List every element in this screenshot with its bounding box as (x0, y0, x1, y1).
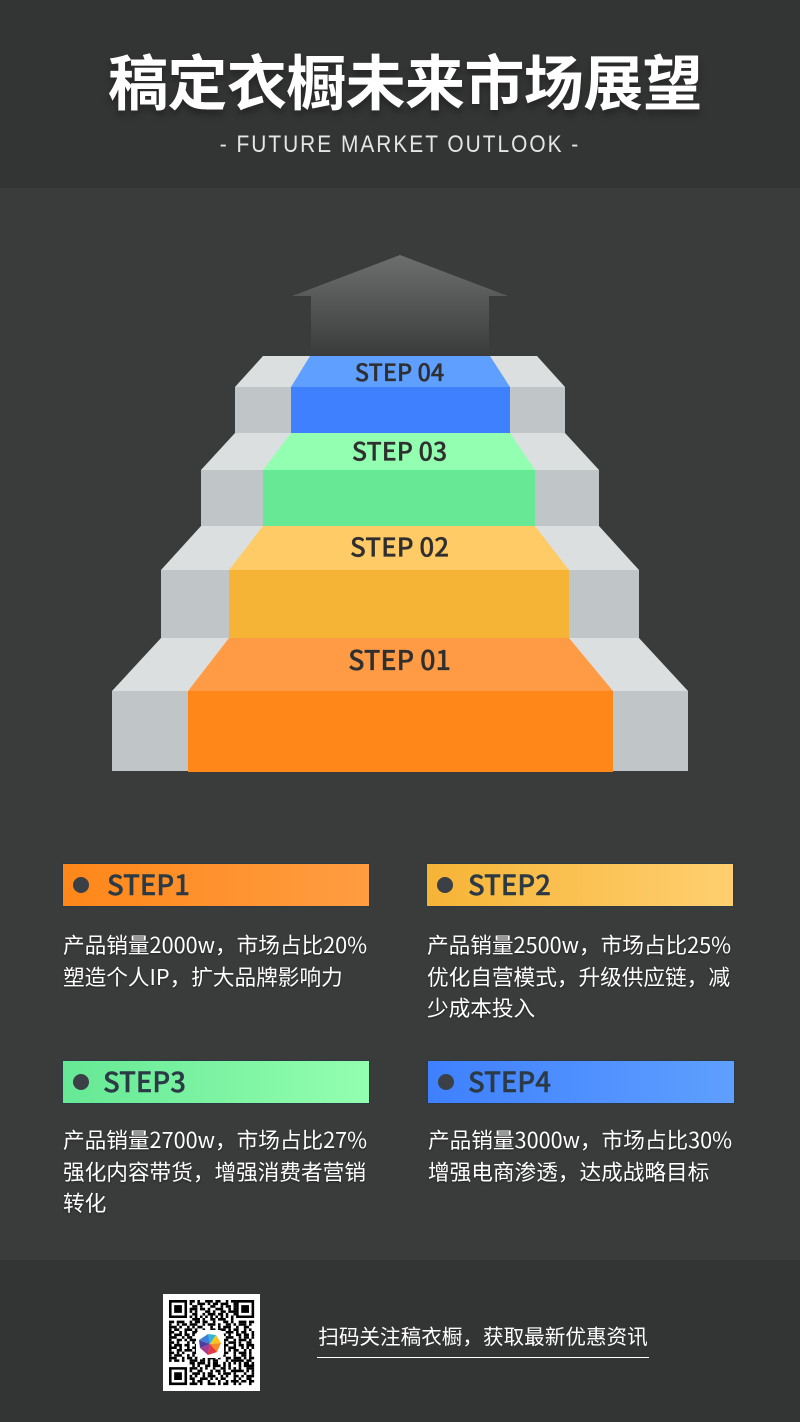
step 2 text: 优化自营模式，升级供应链，减 (427, 960, 730, 992)
step 4 text: 增强电商渗透，达成战略目标 (428, 1156, 709, 1186)
step 2 text (427, 929, 731, 1023)
step 1 text (63, 929, 367, 992)
step 03 (201, 432, 599, 526)
QR centre logo (196, 1330, 224, 1358)
step 1 text: 产品销量2000w，市场占比20% (63, 929, 367, 960)
icon: upward arrow (292, 255, 508, 356)
step 02 (161, 526, 639, 638)
title: 稿定衣橱未来市场展望 (108, 36, 702, 123)
step 3 text (63, 1124, 367, 1218)
panel: step 1 heading bar (63, 864, 369, 906)
staircase infographic (112, 255, 688, 772)
subtitle: - FUTURE MARKET OUTLOOK - (220, 131, 580, 158)
step 2 label: STEP2 (468, 863, 551, 903)
step 3 label: STEP3 (103, 1060, 186, 1100)
step 4 label: STEP4 (468, 1060, 551, 1100)
step 2 text: 少成本投入 (427, 992, 535, 1023)
bullet dot (438, 1074, 454, 1090)
panel: step 4 heading bar (428, 1061, 734, 1103)
bullet dot (73, 1074, 89, 1090)
step 4 text: 产品销量3000w，市场占比30% (428, 1124, 732, 1155)
panel: step 2 heading bar (427, 864, 733, 906)
panel: step 3 heading bar (63, 1061, 369, 1103)
step 1 text: 塑造个人IP，扩大品牌影响力 (63, 960, 343, 992)
QR code (163, 1294, 260, 1391)
bullet dot (73, 877, 89, 893)
footer call to action: 扫码关注稿衣橱，获取最新优惠资讯 (318, 1320, 648, 1350)
step 2 text: 产品销量2500w，市场占比25% (427, 929, 731, 960)
bullet dot (437, 877, 453, 893)
footer band (0, 1260, 800, 1422)
header band (0, 0, 800, 188)
step 3 text: 产品销量2700w，市场占比27% (63, 1124, 367, 1155)
step 01 (112, 638, 688, 772)
step 3 text: 强化内容带货，增强消费者营销 (63, 1156, 366, 1186)
step 3 text: 转化 (63, 1187, 106, 1218)
step 01: STEP 01 (348, 639, 451, 678)
step 02: STEP 02 (350, 528, 449, 564)
step 04 (235, 354, 565, 433)
step 1 label: STEP1 (107, 863, 190, 903)
step 04: STEP 04 (355, 354, 444, 388)
QR finder patterns (169, 1300, 254, 1385)
step 4 text (428, 1124, 732, 1186)
step 03: STEP 03 (352, 432, 447, 468)
